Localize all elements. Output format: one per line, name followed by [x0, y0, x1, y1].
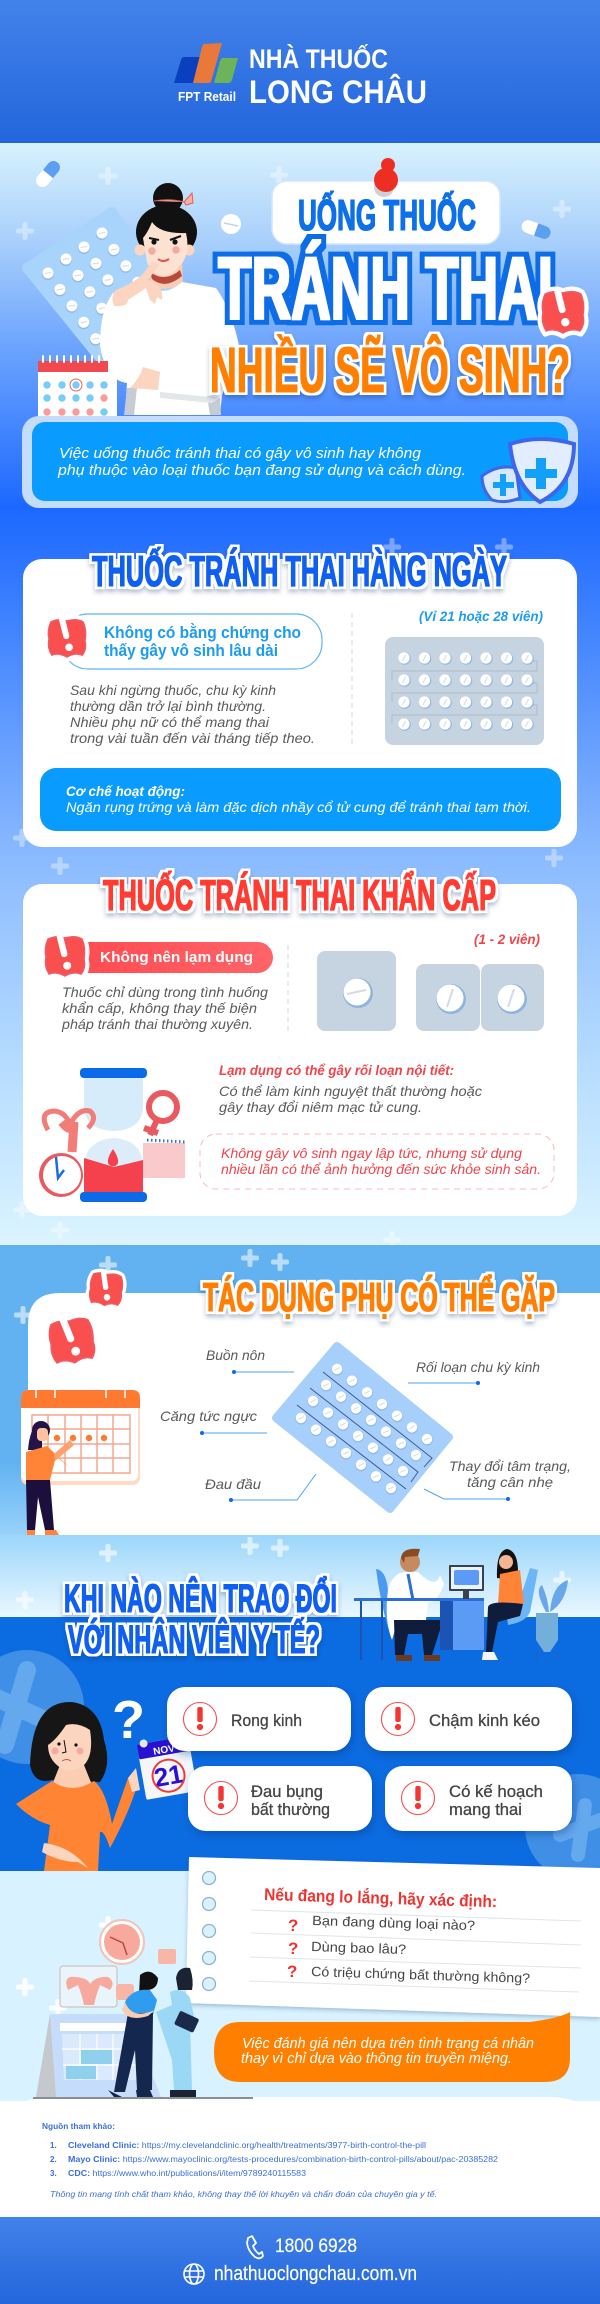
label: mood [424, 1458, 571, 1501]
card: planning pregnancy: mang thai [449, 1800, 522, 1819]
icon: globe [184, 2264, 204, 2284]
hand on chin [112, 262, 162, 306]
label: mood: tăng cân nhẹ [467, 1474, 553, 1490]
endocrine warning: gây thay đổi niêm mạc tử cung. [219, 1099, 422, 1115]
label: headache [205, 1474, 316, 1502]
mechanism box [40, 768, 561, 831]
footer [0, 2217, 600, 2304]
uterus [44, 1111, 94, 1152]
badge [46, 615, 88, 660]
heading [64, 1574, 337, 1662]
intro text [57, 445, 466, 479]
hourglass [80, 1068, 147, 1202]
card: heavy bleeding: Rong kinh [231, 1711, 302, 1730]
person pointing [26, 1421, 74, 1535]
calendar stand [36, 2014, 161, 2097]
speech bubbles [116, 1949, 176, 2000]
footer band [0, 2217, 600, 2304]
explanation text [61, 984, 268, 1032]
endocrine warning: Lạm dụng có thể gây rối loạn nội tiết: [219, 1062, 454, 1078]
intro text: Việc uống thuốc tránh thai có gây vô sinh hay không [59, 445, 422, 462]
light band [0, 1535, 600, 1617]
card: late period: Chậm kinh kéo [429, 1711, 540, 1730]
reference 1: 1. [50, 2141, 57, 2150]
hand on belly [42, 1843, 88, 1868]
FPT Retail: FPT Retail [178, 89, 236, 104]
question mark: ? [112, 1690, 145, 1750]
card: planning pregnancy: Có kế hoạch [449, 1782, 543, 1801]
shields [482, 439, 574, 502]
checklist item 1: ? [288, 1916, 298, 1935]
checklist item 2: ? [288, 1939, 298, 1958]
desk [354, 1598, 484, 1660]
pack label: (Vỉ 21 hoặc 28 viên) [419, 608, 543, 624]
sweater [100, 282, 240, 415]
trousers [124, 388, 221, 415]
lower hand [130, 367, 160, 390]
dashed note: Không gây vô sinh ngay lập tức, nhưng sử dụng [221, 1145, 522, 1161]
mechanism box: Cơ chế hoạt động: [66, 783, 185, 799]
single pill blister [317, 951, 396, 1031]
title pill [272, 181, 500, 244]
background sparkles [13, 166, 571, 1249]
callout: Không có bằng chứng cho [104, 623, 301, 642]
checklist item 3: Có triệu chứng bất thường không? [311, 1964, 530, 1986]
brand name line 1: NHÀ THUỐC [249, 42, 388, 74]
two pill blister [416, 964, 544, 1031]
label: cycle [408, 1359, 540, 1385]
uterus frame [60, 1966, 117, 2007]
explanation text: Sau khi ngừng thuốc, chu kỳ kinh [70, 682, 276, 698]
face [48, 1724, 91, 1771]
ribbon [154, 193, 193, 205]
calendar with date [136, 1732, 198, 1800]
section: side effects [0, 1245, 600, 1535]
plant [536, 1580, 568, 1660]
reference 3: CDC: https://www.who.int/publications/i/item/9789240115583 [68, 2169, 307, 2178]
clinic illustration [36, 1920, 199, 2097]
pin [374, 158, 398, 197]
title line 1: UỐNG THUỐC [298, 189, 476, 240]
explanation text: thường dần trở lại bình thường. [70, 698, 266, 714]
callout [62, 614, 322, 669]
badge [43, 932, 87, 979]
doctor chair [376, 1569, 418, 1628]
brand name line 2: LONG CHÂU [249, 74, 427, 110]
decorative circle right [525, 1774, 600, 1880]
neck [150, 262, 183, 290]
white card [0, 2097, 600, 2218]
card [23, 559, 577, 847]
pill: capsule left [33, 158, 63, 190]
rotated blister pack [276, 1346, 449, 1509]
facial features [52, 1740, 84, 1761]
notebook paper [186, 1857, 600, 2017]
website: nhathuoclongchau.com.vn [214, 2263, 417, 2285]
explanation text: Thuốc chỉ dùng trong tình huống [62, 984, 268, 1000]
bun [153, 183, 183, 213]
decorative circle left [0, 1650, 84, 1764]
sparkles [16, 1537, 571, 1609]
explanation text: pháp tránh thai thường xuyên. [61, 1016, 253, 1032]
doctor and patient scene [354, 1549, 568, 1661]
reference 1: Cleveland Clinic: https://my.clevelandclinic.org/health/treatments/3977-birth-control-the-pill [68, 2141, 426, 2150]
explanation text: khẩn cấp, không thay thế biện [62, 1000, 257, 1016]
pale background [0, 1871, 600, 2101]
patient chair [506, 1568, 538, 1625]
reference 3: 3. [50, 2169, 57, 2178]
intro frame [22, 416, 578, 508]
hand holding calendar [128, 1768, 140, 1792]
endocrine warning [219, 1062, 482, 1115]
face [143, 222, 187, 276]
reference 2: 2. [50, 2155, 57, 2164]
mechanism box: Ngăn rụng trứng và làm đặc dịch nhầy cổ tử cung để tránh thai tạm thời. [66, 799, 531, 815]
disclaimer: Thông tin mang tính chất tham khảo, không thay thế lời khuyên và chẩn đoán của chuyên gia y tế. [50, 2190, 437, 2199]
card: planning pregnancy [385, 1766, 572, 1831]
label: cycle: Rối loạn chu kỳ kinh [416, 1359, 540, 1375]
pill: round [221, 214, 241, 234]
ears [134, 244, 194, 256]
icon: phone [247, 2236, 263, 2258]
warning pill [62, 942, 273, 973]
endocrine warning: Có thể làm kinh nguyệt thất thường hoặc [219, 1083, 482, 1099]
logo [174, 42, 427, 110]
intro panel [32, 422, 568, 501]
pill: capsule right [520, 218, 552, 241]
label: mood: Thay đổi tâm trạng, [449, 1458, 571, 1474]
dashed note [200, 1134, 554, 1189]
blister pack [385, 637, 544, 745]
doctor [387, 1549, 444, 1661]
sweater hem [160, 392, 220, 403]
heading: VỚI NHÂN VIÊN Y TẾ? [68, 1616, 320, 1662]
white panel [28, 1293, 600, 1535]
badge small [86, 1268, 126, 1310]
checklist heading: Nếu đang lo lắng, hãy xác định: [264, 1885, 497, 1911]
nurse [156, 1968, 199, 2097]
orange top [16, 1778, 137, 1871]
eyes, cheeks and mouth [148, 236, 181, 261]
clock [100, 1920, 144, 1964]
references heading: Nguồn tham khảo: [42, 2122, 115, 2131]
label: nausea: Buồn nôn [206, 1347, 265, 1363]
warning pill: Không nên lạm dụng [100, 949, 253, 966]
neck [52, 1765, 92, 1790]
card: late period [365, 1687, 572, 1751]
checklist item 2 [288, 1939, 406, 1958]
orange speech bubble: Việc đánh giá nên dựa trên tình trạng cá nhân [242, 2035, 534, 2052]
checklist item 3: ? [287, 1962, 297, 1981]
explanation text: Nhiều phụ nữ có thể mang thai [70, 714, 270, 730]
checklist item 2: Dùng bao lâu? [311, 1939, 406, 1957]
rings [202, 1872, 216, 1990]
main gradient background [0, 143, 600, 1246]
dashed note: nhiều lần có thể ảnh hưởng đến sức khỏe sinh sản. [221, 1161, 541, 1177]
label: breast tenderness: Căng tức ngực [160, 1408, 257, 1424]
callout: thấy gây vô sinh lâu dài [104, 642, 278, 660]
panel: daily pill [23, 545, 577, 847]
label: headache: Đau đầu [205, 1476, 261, 1492]
badge large [44, 1311, 99, 1369]
logo flags [174, 43, 238, 83]
blister pack [27, 212, 188, 381]
patient [482, 1549, 524, 1660]
clock [39, 1153, 83, 1197]
orange speech bubble [214, 2012, 570, 2082]
references panel [0, 2097, 600, 2218]
header band [0, 0, 600, 143]
warning badge [540, 287, 586, 336]
pack label: (1 - 2 viên) [474, 931, 540, 947]
hair [136, 205, 197, 259]
ruled lines [249, 1910, 581, 1992]
panel: emergency pill [23, 869, 577, 1216]
sparkles [14, 1249, 289, 1324]
neckline [150, 270, 182, 284]
patient [108, 1972, 158, 2097]
worried woman [16, 1702, 140, 1871]
female symbol [144, 1093, 177, 1135]
hourglass illustration [39, 1068, 185, 1202]
card: abdominal pain: bất thường [251, 1800, 330, 1819]
woman thinking [100, 183, 240, 415]
section background [0, 1245, 600, 1535]
monitor [449, 1565, 484, 1599]
card: abdominal pain [188, 1766, 372, 1831]
section: self check [0, 1857, 600, 2101]
intro text: phụ thuộc vào loại thuốc bạn đang sử dụng và cách dùng. [57, 462, 466, 479]
label: nausea [206, 1347, 294, 1374]
explanation text [70, 682, 315, 746]
sparkles [16, 1916, 117, 2017]
date: 21 [152, 1758, 185, 1793]
blue band [0, 1617, 600, 1871]
checklist item 1: Bạn đang dùng loại nào? [312, 1913, 475, 1933]
section: when to consult [0, 1535, 600, 1880]
label: breast tenderness [160, 1408, 267, 1435]
hero [27, 158, 586, 422]
reference 2: Mayo Clinic: https://www.mayoclinic.org/tests-procedures/combination-birth-control-pills/about/pac-20385282 [68, 2155, 499, 2164]
heading: KHI NÀO NÊN TRAO ĐỔI [64, 1574, 337, 1621]
calendar grid [143, 1140, 185, 1178]
orange speech bubble: thay vì chỉ dựa vào thông tin truyền miệng. [241, 2050, 512, 2067]
calendar [21, 1389, 140, 1485]
card [23, 884, 577, 1216]
phone number: 1800 6928 [275, 2236, 357, 2257]
card: heavy bleeding [167, 1687, 351, 1751]
hair [30, 1702, 107, 1782]
desk calendar [38, 356, 117, 422]
explanation text: trong vài tuần đến vài tháng tiếp theo. [70, 730, 315, 746]
intro box [22, 416, 578, 508]
month: NOV [152, 1743, 176, 1758]
card: abdominal pain: Đau bụng [251, 1782, 323, 1801]
